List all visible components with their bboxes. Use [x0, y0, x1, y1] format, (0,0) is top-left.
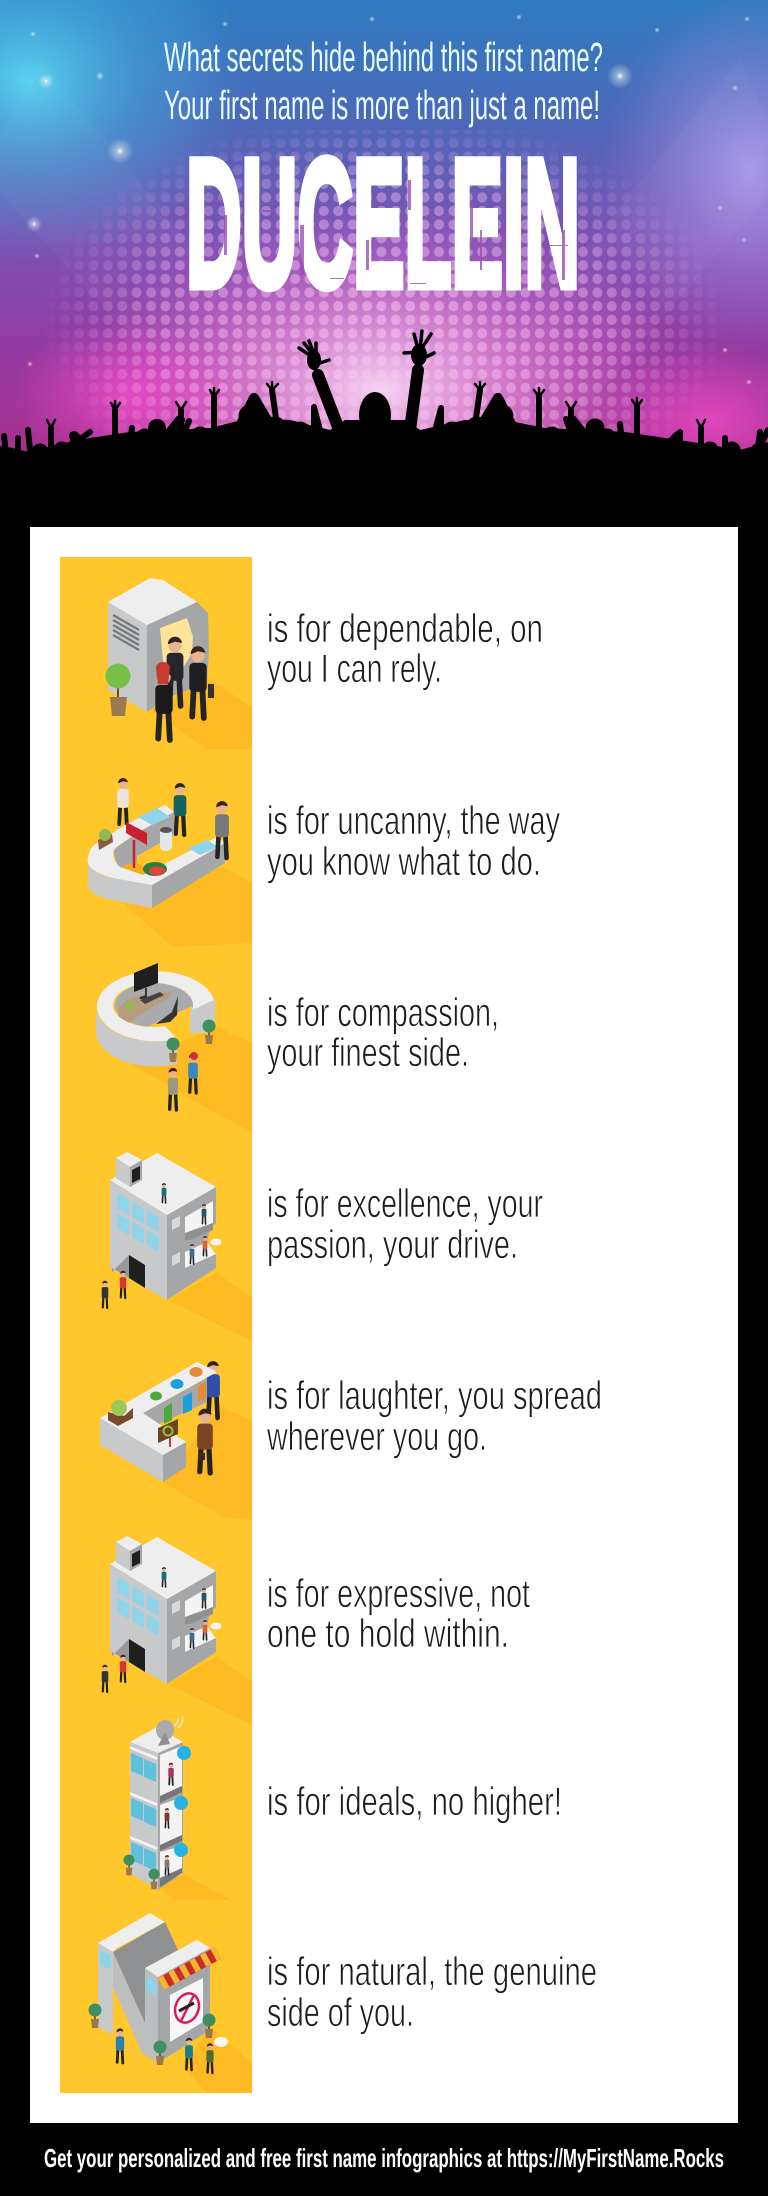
text: C: [267, 991, 499, 1075]
illustration: letter L recycling station: [100, 1361, 252, 1520]
illustration: second letter E building: [102, 1536, 252, 1724]
text: C: your finest side.: [267, 1031, 469, 1075]
illustration: letter N shop: [88, 1913, 252, 2093]
text: E: [267, 1182, 543, 1267]
illustration: letter D office: [106, 578, 252, 749]
illustration: letter U counter: [88, 778, 252, 947]
illustration: letter C desk: [96, 963, 252, 1132]
text: E: passion, your drive.: [267, 1223, 518, 1267]
intro text: [164, 34, 603, 128]
text: E: is for excellence, your: [267, 1182, 543, 1226]
text: L: wherever you go.: [266, 1415, 487, 1459]
yellow illustration strip: [60, 557, 252, 2093]
text: L: is for laughter, you spread: [267, 1374, 602, 1418]
crowd silhouette: [0, 331, 768, 662]
text: U: is for uncanny, the way: [267, 799, 560, 843]
center figure: [299, 331, 440, 460]
text: D: you I can rely.: [267, 647, 442, 691]
white content panel: [30, 527, 738, 2123]
title: first name: [186, 121, 580, 325]
illustration: letter I tower: [123, 1716, 230, 1900]
text: second E: [267, 1572, 530, 1656]
text: U: you know what to do.: [267, 840, 541, 884]
text: U: [267, 799, 560, 884]
illustration: letter E building: [102, 1152, 252, 1340]
text: I: is for ideals, no higher!: [267, 1780, 562, 1824]
text: N: [267, 1950, 597, 2035]
text: C: is for compassion,: [267, 991, 499, 1035]
text: L: [266, 1374, 602, 1459]
text: second E: one to hold within.: [267, 1612, 509, 1656]
text: N: side of you.: [267, 1991, 414, 2035]
text: N: is for natural, the genuine: [267, 1950, 597, 1994]
text: second E: is for expressive, not: [267, 1572, 530, 1616]
text: D: is for dependable, on: [267, 607, 543, 651]
hero background: [0, 0, 768, 452]
text: D: [267, 607, 543, 691]
